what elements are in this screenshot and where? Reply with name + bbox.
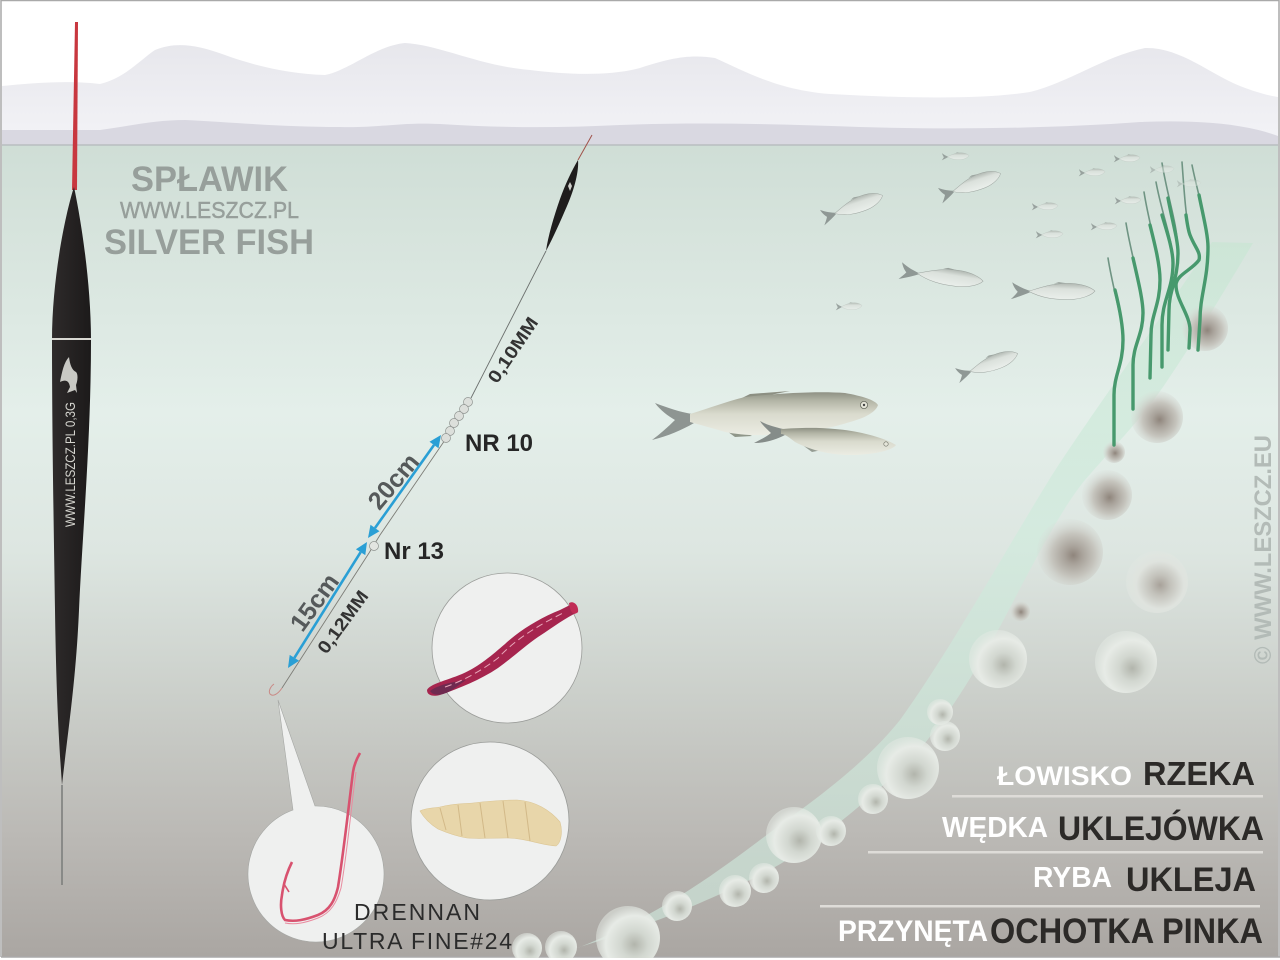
row: łowisko: RZEKA xyxy=(1143,755,1255,792)
bait circle: pinkie maggot xyxy=(411,742,569,900)
title: WWW.LESZCZ.PL xyxy=(120,197,299,223)
arrow: 20cm xyxy=(368,435,441,538)
water line xyxy=(2,144,1278,146)
fishing rig xyxy=(269,135,592,695)
stones on bank xyxy=(512,305,1228,960)
watermark: © WWW.LESZCZ.EU xyxy=(1250,435,1277,664)
arrow: 15cm xyxy=(288,542,367,668)
cover below frame xyxy=(0,958,1280,960)
row: przynęta: PRZYNĘTA xyxy=(838,915,988,948)
second large fish xyxy=(754,421,896,455)
hook label xyxy=(322,899,512,954)
title: SPŁAWIK xyxy=(131,160,288,199)
row: łowisko: ŁOWISKO xyxy=(997,761,1132,791)
rig labels: 0,10MM xyxy=(484,313,542,387)
fish school xyxy=(819,152,1201,383)
river bank band xyxy=(570,242,1253,950)
row: ryba: UKLEJA xyxy=(1126,861,1256,899)
rig labels xyxy=(285,313,542,657)
title: SILVER FISH xyxy=(104,223,314,262)
hook label: DRENNAN xyxy=(354,899,480,925)
row: wędka xyxy=(868,810,1264,854)
sky background xyxy=(0,0,1280,146)
rig labels: NR 10 xyxy=(465,430,533,457)
hook callout xyxy=(248,700,384,942)
split shot NR 10 xyxy=(442,398,472,442)
water plants xyxy=(1108,162,1208,445)
row: wędka: UKLEJÓWKA xyxy=(1058,810,1264,848)
row: ryba xyxy=(820,861,1260,908)
near hills xyxy=(2,120,1278,146)
rig labels: 20cm xyxy=(362,448,425,515)
float label: WWW.LESZCZ.PL 0,3G xyxy=(63,402,78,527)
rig labels: 15cm xyxy=(285,568,345,637)
bait circle: bloodworm xyxy=(427,573,582,723)
hook label: ULTRA FINE#24 xyxy=(322,928,512,954)
title xyxy=(104,160,314,262)
distant mountains xyxy=(2,43,1278,146)
float fish logo xyxy=(60,357,78,393)
split shot Nr 13 xyxy=(370,542,378,550)
row: wędka: WĘDKA xyxy=(942,812,1048,844)
row: łowisko xyxy=(952,755,1263,798)
row: ryba: RYBA xyxy=(1033,862,1112,894)
row: przynęta xyxy=(838,912,1263,951)
large fish xyxy=(652,391,878,440)
rig labels: 0,12MM xyxy=(313,587,373,657)
rig labels: Nr 13 xyxy=(384,538,444,565)
hook on rig xyxy=(269,684,282,695)
row: przynęta: OCHOTKA PINKA xyxy=(990,912,1263,951)
float: large xyxy=(52,22,91,885)
info table xyxy=(820,755,1264,951)
